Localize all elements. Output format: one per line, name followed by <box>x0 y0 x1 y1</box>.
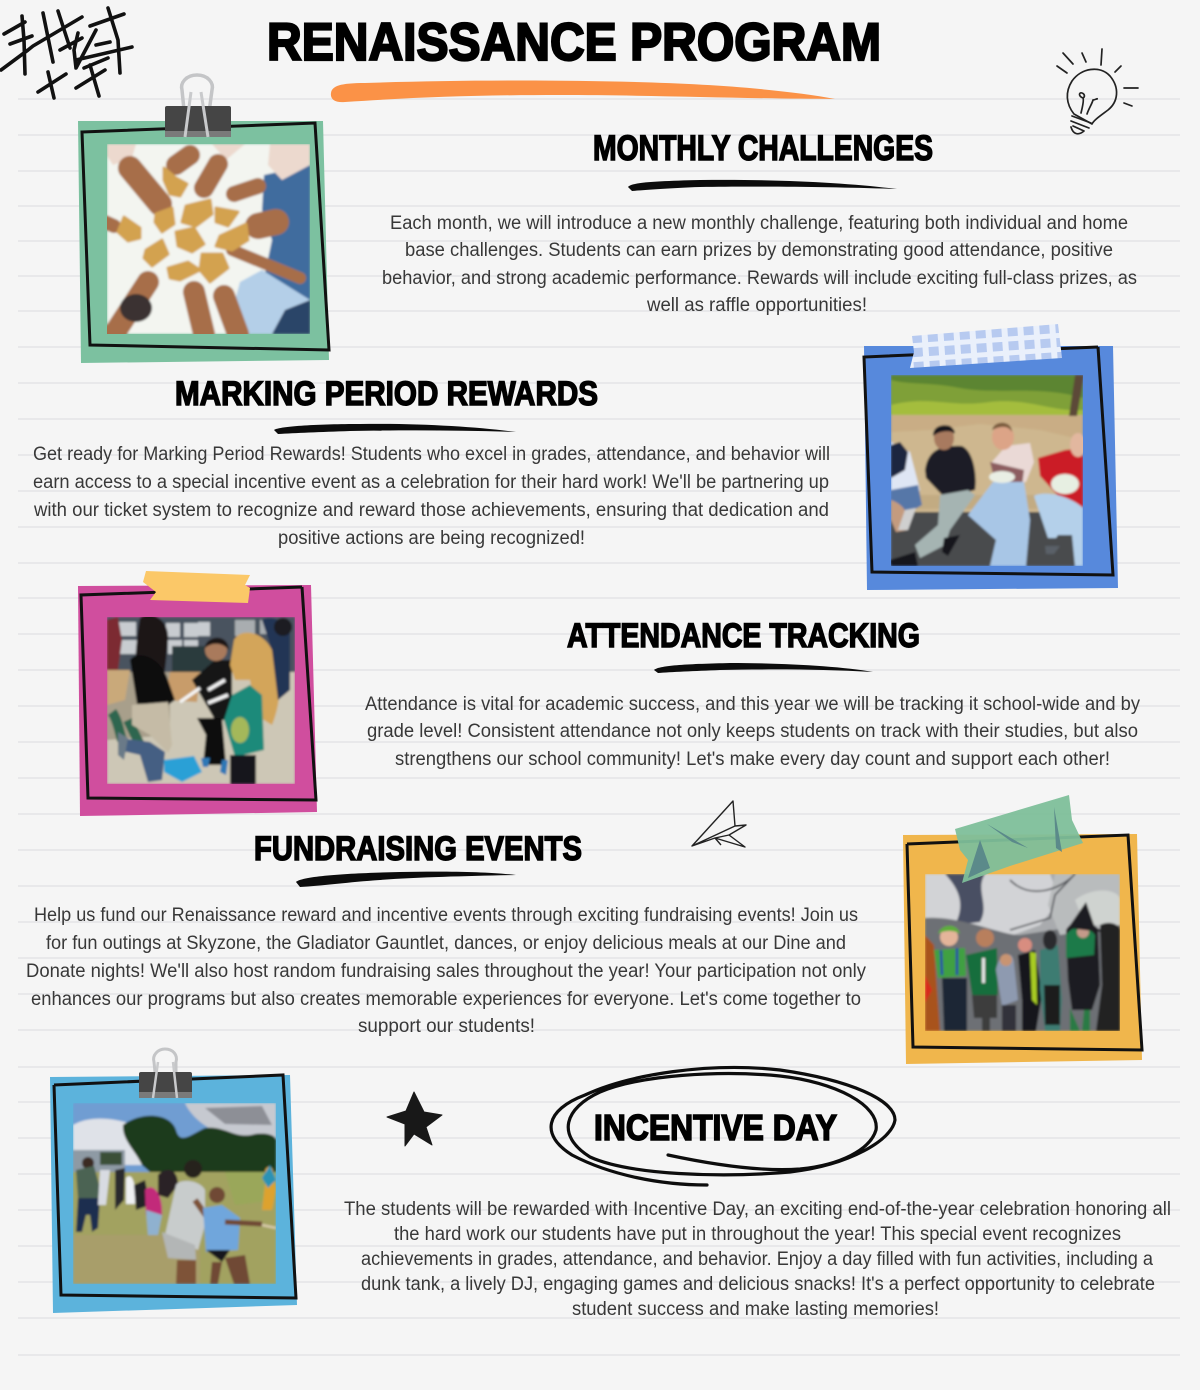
hand-drawn frame <box>81 587 316 800</box>
photo: hands holding puzzle pieces <box>105 144 310 334</box>
underline brush <box>296 872 516 887</box>
heading: fundraising events: FUNDRAISING EVENTS <box>254 830 582 868</box>
heading: marking period rewards: MARKING PERIOD REWARDS <box>175 375 598 413</box>
heading: monthly challenges: MONTHLY CHALLENGES <box>593 129 933 168</box>
underline brush <box>654 663 873 673</box>
text block: fundraising: enhances our programs but also creates memorable experiences for everyone. Let's come together to <box>31 989 861 1010</box>
text block: fundraising: Help us fund our Renaissance reward and incentive events through exciting fundraising events! Join us <box>34 905 858 926</box>
card background <box>78 121 329 363</box>
text block: incentive day: the hard work our students have put in throughout the year! This special event recognizes <box>394 1224 1121 1245</box>
hand-drawn frame <box>864 347 1113 575</box>
text block: marking period: earn access to a special incentive event as a celebration for their hard work! We'll be partnering up <box>33 472 829 493</box>
title: RENAISSANCE PROGRAM <box>267 13 881 72</box>
washi tape: yellow <box>143 571 250 603</box>
card background <box>903 834 1142 1064</box>
text block: monthly challenges: Each month, we will introduce a new monthly challenge, featuring both individual and home <box>390 213 1128 234</box>
photo: students in classroom <box>107 615 295 784</box>
photo: tug of war in a field <box>73 1103 276 1284</box>
panel: marking period photo card <box>864 324 1118 590</box>
text block: monthly challenges: base challenges. Students can earn prizes by demonstrating good attendance, positive <box>405 240 1113 261</box>
panel: monthly challenges photo card <box>78 75 329 363</box>
text block: attendance: Attendance is vital for academic success, and this year we will be tracking it school-wide and by <box>365 694 1140 715</box>
text block: monthly challenges <box>382 213 1137 316</box>
title underline: orange brush stroke <box>331 81 835 102</box>
text block: monthly challenges: behavior, and strong academic performance. Rewards will include exciting full-class prizes, as <box>382 268 1137 289</box>
text block: fundraising: for fun outings at Skyzone, the Gladiator Gauntlet, dances, or enjoy delicious meals at our Dine and <box>46 933 846 954</box>
washi tape: green <box>955 795 1083 883</box>
icon: binder clip <box>165 75 231 137</box>
scribble ellipse around incentive day <box>551 1068 895 1185</box>
icon: binder clip <box>139 1049 192 1098</box>
hand-drawn frame <box>907 835 1142 1050</box>
text block: marking period: Get ready for Marking Period Rewards! Students who excel in grades, attendance, and behavior will <box>33 444 830 465</box>
photo: students in costumes by mural <box>925 874 1120 1031</box>
text block: marking period: positive actions are being recognized! <box>278 528 585 549</box>
icon: paper plane <box>692 801 746 847</box>
panel: incentive day photo card <box>50 1049 297 1313</box>
text block: incentive day: achievements in grades, attendance, and behavior. Enjoy a day filled with fun activities, including a <box>361 1249 1153 1270</box>
photo: students eating outside <box>890 375 1086 566</box>
text block: incentive day <box>344 1199 1171 1320</box>
panel: attendance photo card <box>78 571 317 816</box>
hand-drawn frame <box>54 1075 296 1298</box>
icon: hash scribble <box>1 8 132 98</box>
text block: monthly challenges: well as raffle opportunities! <box>646 295 867 316</box>
text block: fundraising: Donate nights! We'll also host random fundraising sales throughout the year! Your participation not only <box>26 961 866 982</box>
panel: fundraising photo card <box>903 795 1142 1064</box>
hand-drawn frame <box>82 123 329 350</box>
text block: incentive day: The students will be rewarded with Incentive Day, an exciting end-of-the-year celebration honoring all <box>344 1199 1171 1220</box>
text block: attendance <box>365 694 1140 770</box>
heading: attendance tracking: ATTENDANCE TRACKING <box>567 617 920 655</box>
icon: light bulb <box>1057 49 1138 134</box>
text block: incentive day: dunk tank, a lively DJ, engaging games and delicious snacks! It's a perfect opportunity to celebrate <box>361 1274 1155 1295</box>
text block: marking period: with our ticket system to recognize and reward those achievements, ensuring that dedication and <box>33 500 829 521</box>
text block: incentive day: student success and make lasting memories! <box>572 1299 939 1320</box>
text block: attendance: strengthens our school community! Let's make every day count and support each other! <box>395 749 1110 770</box>
card background <box>864 346 1118 590</box>
text block: fundraising: support our students! <box>358 1016 535 1037</box>
text block: attendance: grade level! Consistent attendance not only keeps students on track with their studies, but also <box>367 721 1138 742</box>
heading: incentive day: INCENTIVE DAY <box>594 1107 837 1148</box>
underline brush <box>274 424 516 434</box>
underline brush <box>628 180 897 191</box>
card background <box>50 1075 297 1313</box>
text block: fundraising <box>26 905 866 1037</box>
washi tape: blue gingham <box>910 324 1062 368</box>
card background <box>78 585 317 816</box>
text block: marking period <box>33 444 830 549</box>
icon: black star <box>387 1092 442 1146</box>
